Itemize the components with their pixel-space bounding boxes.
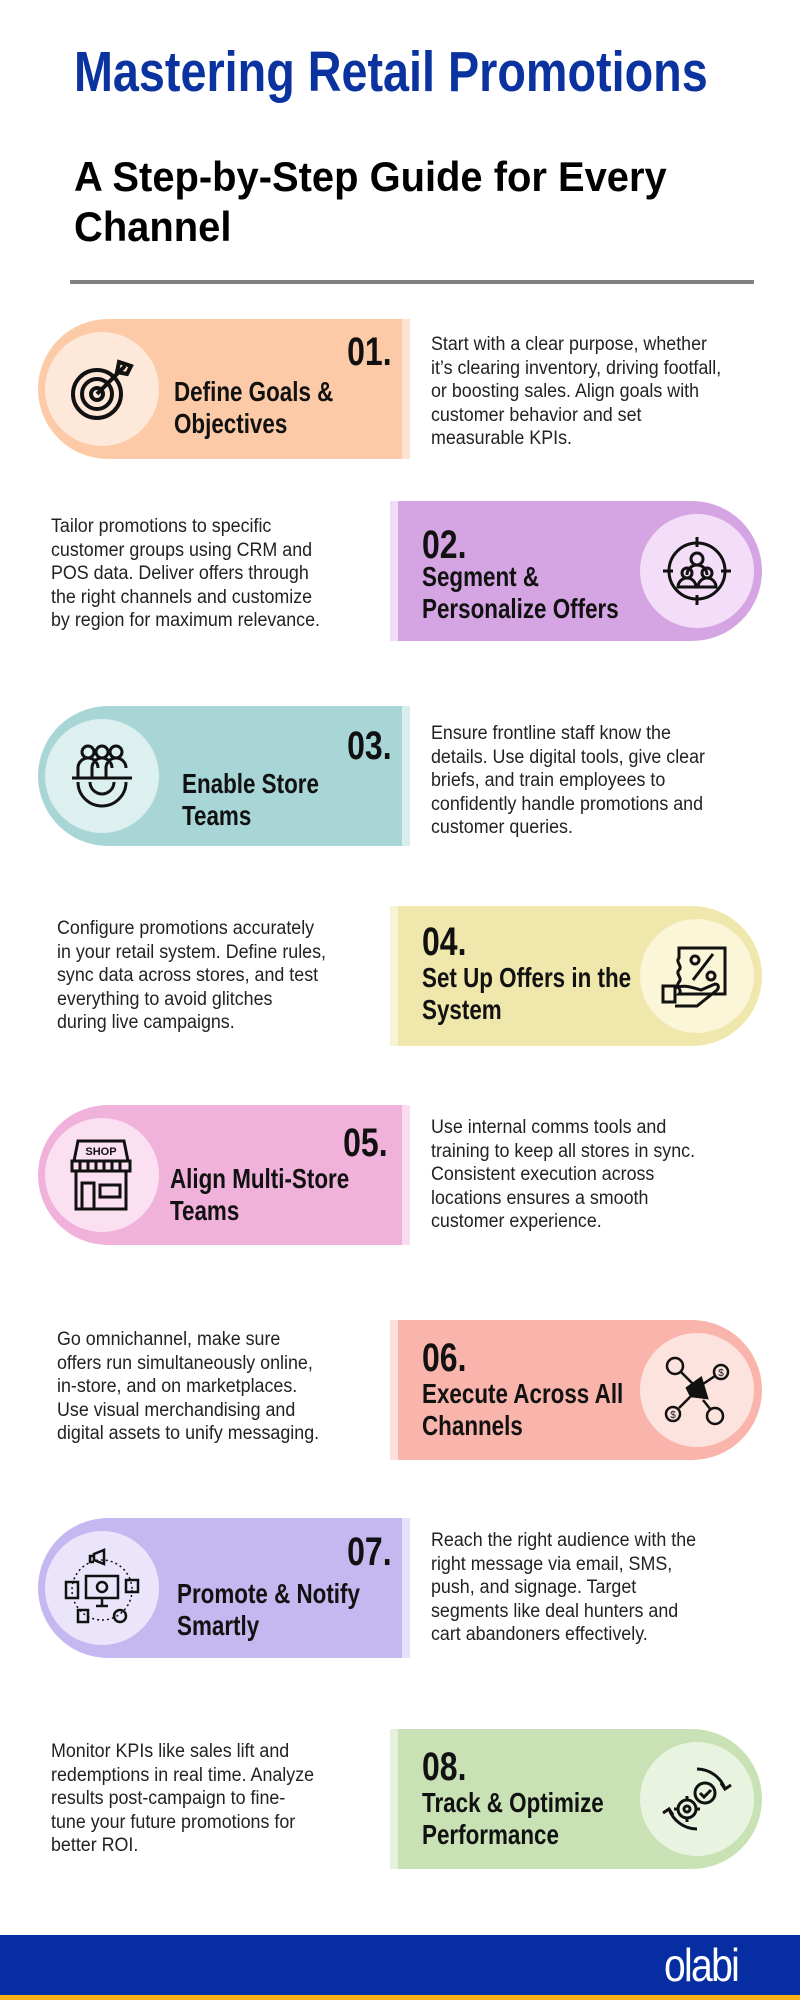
text block: step 04: during live campaigns. [57, 1012, 235, 1033]
text block: step 06: Use visual merchandising and [57, 1400, 295, 1421]
text block: step 06: in-store, and on marketplaces. [57, 1376, 297, 1397]
text block: step 03 [431, 723, 705, 838]
panel: step 02 [390, 501, 762, 641]
text block: step 03: details. Use digital tools, give clear [431, 747, 705, 768]
icon: megaphone network: $ [670, 1410, 676, 1421]
text block: step 08 [51, 1741, 314, 1856]
icon: offer hand [640, 919, 754, 1033]
text block: step 08: Monitor KPIs like sales lift and [51, 1741, 289, 1762]
text block: step 02: by region for maximum relevance. [51, 610, 320, 631]
text block: step 04: everything to avoid glitches [57, 989, 272, 1010]
text block: step 07 [431, 1530, 696, 1645]
text block: step 02: POS data. Deliver offers through [51, 563, 309, 584]
panel: step 03 [38, 706, 410, 846]
icon: promote monitor [45, 1531, 159, 1645]
heading: Enable Store [182, 768, 319, 799]
heading: Performance [422, 1819, 559, 1850]
heading [177, 1578, 360, 1641]
heading [422, 1378, 623, 1441]
text block: step 04: sync data across stores, and test [57, 965, 318, 986]
text block: step 01: customer behavior and set [431, 405, 641, 426]
panel: step 04 [390, 906, 762, 1046]
heading: Align Multi-Store [170, 1163, 349, 1194]
heading: Set Up Offers in the [422, 962, 631, 993]
heading: Teams [182, 800, 251, 831]
text block: step 01: it’s clearing inventory, driving footfall, [431, 358, 721, 379]
heading: Track & Optimize [422, 1787, 604, 1818]
logo: olabi: olabi [664, 1939, 738, 1991]
heading: Teams [170, 1195, 239, 1226]
title: Mastering Retail Promotions [74, 40, 708, 104]
heading [182, 768, 319, 831]
heading [422, 561, 619, 624]
icon: team gear [45, 719, 159, 833]
heading [422, 1787, 604, 1850]
text block: step 06: Go omnichannel, make sure [57, 1329, 280, 1350]
number: 06. [422, 1336, 466, 1380]
heading: System [422, 994, 502, 1025]
heading: Objectives [174, 408, 287, 439]
text block: step 02: the right channels and customize [51, 587, 312, 608]
number: 03. [348, 724, 392, 768]
heading [422, 962, 631, 1025]
text block: step 02 [51, 516, 320, 631]
icon: target [45, 332, 159, 446]
text block: step 08: better ROI. [51, 1835, 138, 1856]
panel: step 05 [38, 1105, 410, 1245]
text block: step 05: training to keep all stores in sync. [431, 1141, 695, 1162]
text block: step 06 [57, 1329, 319, 1444]
text block: step 02: Tailor promotions to specific [51, 516, 271, 537]
icon: segment group [640, 514, 754, 628]
text block: step 07: cart abandoners effectively. [431, 1624, 648, 1645]
panel: step 01 [38, 319, 410, 459]
number: 08. [422, 1745, 466, 1789]
text block: step 05 [431, 1117, 695, 1232]
text block: step 07: right message via email, SMS, [431, 1554, 672, 1575]
number: 07. [348, 1530, 392, 1574]
heading: Personalize Offers [422, 593, 619, 624]
text block: step 03: briefs, and train employees to [431, 770, 665, 791]
heading [174, 376, 333, 439]
icon: gears [640, 1742, 754, 1856]
text block: step 05: locations ensures a smooth [431, 1188, 648, 1209]
text block: step 06: offers run simultaneously online, [57, 1353, 313, 1374]
text block: step 04: in your retail system. Define rules, [57, 942, 326, 963]
text block: step 08: results post-campaign to fine- [51, 1788, 285, 1809]
heading: Define Goals & [174, 376, 333, 407]
text block: step 05: Use internal comms tools and [431, 1117, 666, 1138]
text block: step 06: digital assets to unify messaging. [57, 1423, 319, 1444]
text block: step 02: customer groups using CRM and [51, 540, 312, 561]
panel: step 07 [38, 1518, 410, 1658]
text block: step 03: Ensure frontline staff know the [431, 723, 671, 744]
text block: step 03: customer queries. [431, 817, 573, 838]
text block: step 04: Configure promotions accurately [57, 918, 314, 939]
text block: step 07: Reach the right audience with the [431, 1530, 696, 1551]
panel: step 06 [390, 1320, 762, 1460]
heading: Segment & [422, 561, 539, 592]
subtitle: A Step-by-Step Guide for Every [74, 153, 667, 200]
text block: step 04 [57, 918, 326, 1033]
text block: step 01: or boosting sales. Align goals with [431, 381, 699, 402]
heading: Promote & Notify [177, 1578, 360, 1609]
subtitle: Channel [74, 203, 231, 250]
text block: step 01 [431, 334, 721, 449]
icon: megaphone network: $ [718, 1368, 724, 1379]
number: 01. [348, 330, 392, 374]
subtitle [74, 153, 667, 250]
text block: step 08: redemptions in real time. Analyze [51, 1765, 314, 1786]
heading: Execute Across All [422, 1378, 623, 1409]
icon: shop: SHOP [85, 1146, 117, 1158]
text block: step 03: confidently handle promotions and [431, 794, 703, 815]
text block: step 07: segments like deal hunters and [431, 1601, 678, 1622]
number: 02. [422, 523, 466, 567]
panel: step 08 [390, 1729, 762, 1869]
footer bar [0, 1935, 800, 1995]
heading [170, 1163, 349, 1226]
text block: step 08: tune your future promotions for [51, 1812, 295, 1833]
heading: Smartly [177, 1610, 259, 1641]
text block: step 05: Consistent execution across [431, 1164, 654, 1185]
text block: step 07: push, and signage. Target [431, 1577, 636, 1598]
number: 05. [344, 1121, 388, 1165]
text block: step 01: Start with a clear purpose, whether [431, 334, 707, 355]
icon: megaphone network [640, 1333, 754, 1447]
icon: shop [45, 1118, 159, 1232]
number: 04. [422, 920, 466, 964]
heading: Channels [422, 1410, 523, 1441]
text block: step 01: measurable KPIs. [431, 428, 572, 449]
text block: step 05: customer experience. [431, 1211, 602, 1232]
